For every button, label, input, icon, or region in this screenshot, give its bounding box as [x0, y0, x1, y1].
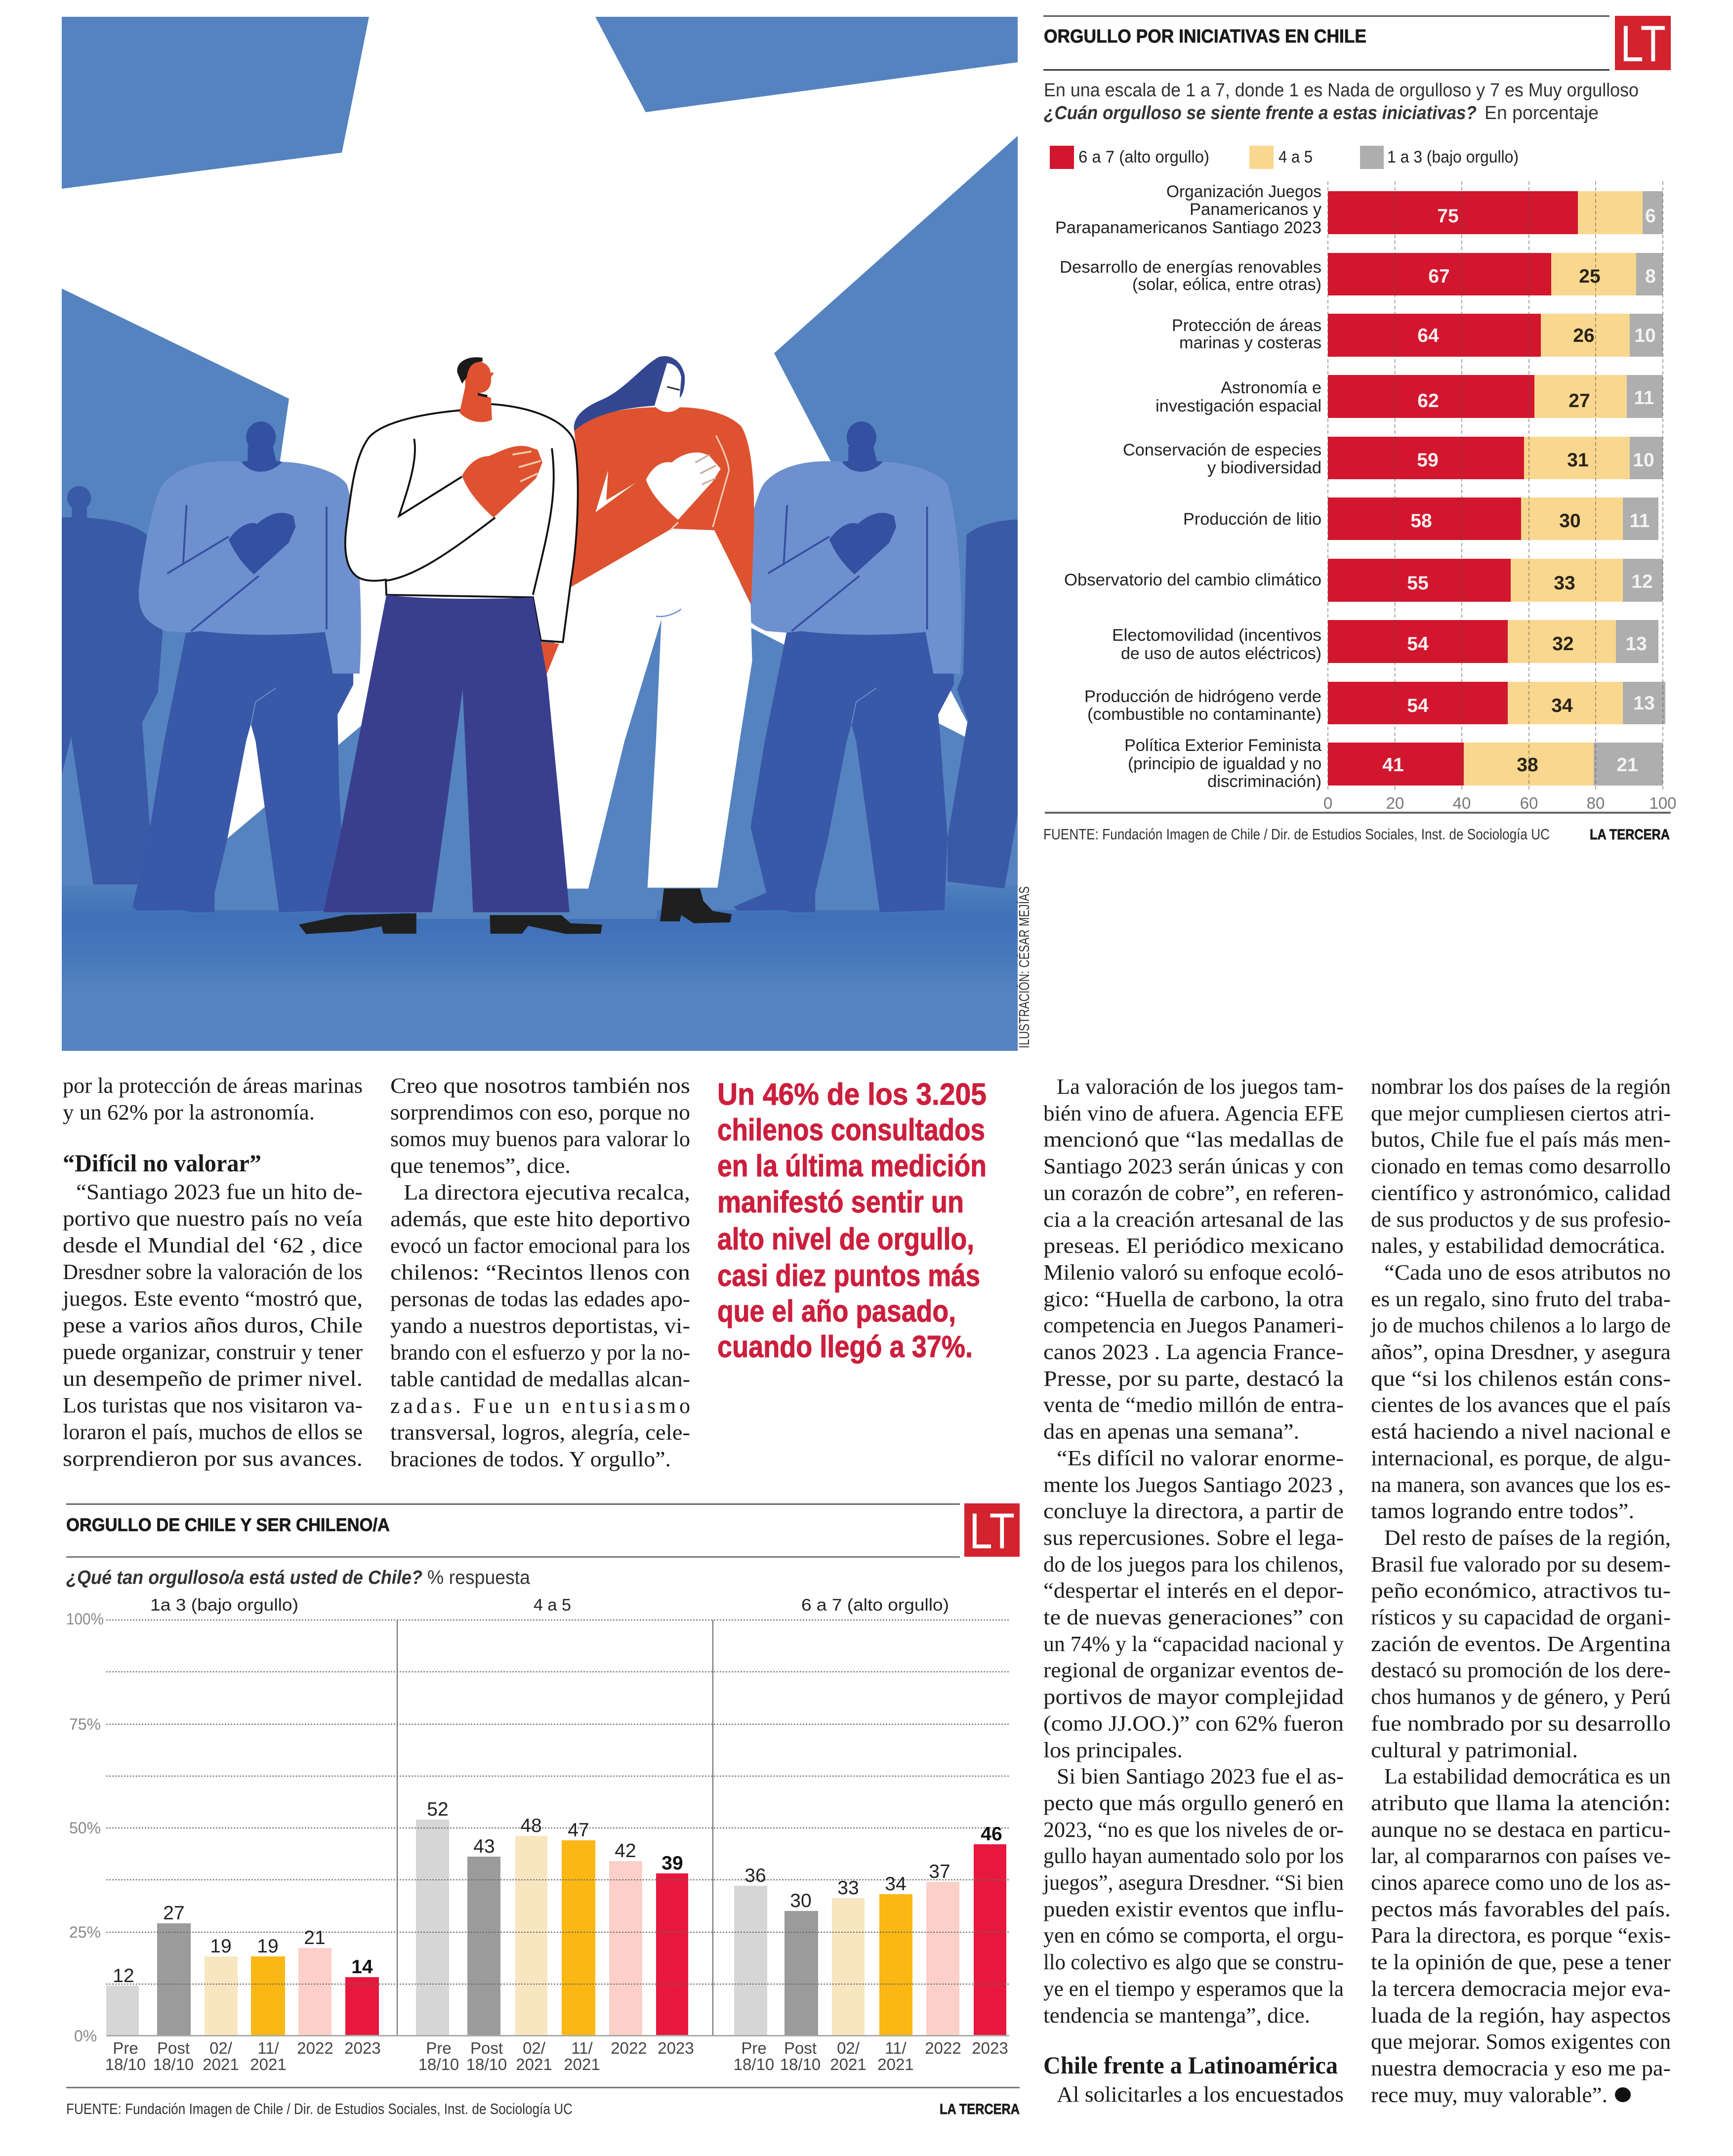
y axis labels: 75% — [69, 1715, 101, 1733]
article column 4: internacional, es porque, de algu- — [1371, 1446, 1671, 1470]
article column 1: un desempeño de primer nivel. — [63, 1367, 363, 1391]
bar values: 25 — [1579, 266, 1601, 287]
article column 3: portivos de mayor complejidad — [1043, 1685, 1344, 1709]
x axis: 80 — [1587, 794, 1605, 812]
row labels: discriminación) — [1207, 772, 1321, 791]
bars group 6 a 7 — [734, 1844, 1006, 2035]
y axis labels: 0% — [74, 2027, 97, 2045]
x axis labels: 2021 — [203, 2055, 239, 2073]
bar values: 14 — [351, 1956, 373, 1978]
x axis labels: 18/10 — [418, 2055, 459, 2073]
article column 4: te la opinión de que, pese a tener — [1371, 1950, 1671, 1974]
x axis labels: 2021 — [877, 2055, 914, 2073]
source line — [66, 2100, 1020, 2117]
row labels: Panamericanos y — [1190, 200, 1321, 219]
bar values: 34 — [885, 1873, 907, 1895]
bar values: 13 — [1633, 693, 1655, 714]
article column 3: un corazón de cobre”, en referen- — [1043, 1181, 1344, 1205]
floor — [62, 890, 1018, 970]
article column 2: chilenos: “Recintos llenos con — [390, 1260, 690, 1285]
row labels: marinas y costeras — [1179, 333, 1321, 352]
woman in red top — [546, 356, 754, 923]
article column 4: cionado en temas como desarrollo — [1371, 1154, 1671, 1178]
article column 4: Del resto de países de la región, — [1384, 1526, 1671, 1550]
bar values: 75 — [1437, 206, 1459, 227]
article column 4: que mejor cumpliesen ciertos atri- — [1371, 1101, 1671, 1125]
x axis labels: 18/10 — [734, 2055, 774, 2073]
bar values: 10 — [1634, 325, 1656, 346]
article column 3: tendencia se mantenga”, dice. — [1043, 2003, 1310, 2028]
bar values: 59 — [1417, 450, 1439, 471]
source line: LA TERCERA — [940, 2101, 1020, 2117]
x axis labels: 18/10 — [780, 2055, 821, 2073]
subheading: “Difícil no valorar” — [63, 1149, 261, 1177]
article column 3: competencia en Juegos Panameri- — [1043, 1313, 1344, 1337]
bar values: 31 — [1567, 450, 1589, 471]
chart subtitle: ¿Cuán orgulloso se siente frente a estas iniciativas? — [1044, 103, 1477, 124]
article column 4: que “si los chilenos están cons- — [1371, 1367, 1671, 1391]
x axis labels: 18/10 — [105, 2055, 146, 2073]
x axis labels: Post — [157, 2039, 190, 2057]
pull quote: en la última medición — [717, 1149, 987, 1183]
article column 2: table cantidad de medallas alcan- — [390, 1367, 690, 1391]
white star — [62, 17, 1018, 840]
x axis labels: 2022 — [611, 2039, 647, 2057]
x axis labels — [105, 2039, 1008, 2073]
article column 3: gico: “Huella de carbono, la otra — [1043, 1287, 1344, 1311]
bar values: 52 — [427, 1799, 449, 1820]
bar values: 34 — [1551, 695, 1573, 716]
article column 3: Santiago 2023 serán únicas y con — [1043, 1154, 1344, 1178]
article column 4: tamos logrando entre todos”. — [1371, 1499, 1634, 1523]
LT logo: LT — [1620, 15, 1666, 73]
article column 1: juegos. Este evento “mostró que, — [62, 1286, 363, 1311]
bar values — [1382, 206, 1656, 776]
article column 3: “despertar el interés en el depor- — [1043, 1578, 1344, 1603]
stacked bars — [1328, 181, 1665, 790]
bar values: 54 — [1407, 695, 1429, 716]
bar values: 43 — [473, 1836, 495, 1857]
article column 2: Creo que nosotros también nos — [390, 1074, 690, 1098]
article column 3: mente los Juegos Santiago 2023 , — [1043, 1473, 1344, 1497]
bar values: 19 — [257, 1936, 279, 1957]
article column 2: yando a nuestros deportistas, vi- — [390, 1314, 690, 1338]
article column 1: loraron el país, muchos de ellos se — [63, 1420, 363, 1444]
article column 1: sorprendieron por sus avances. — [63, 1447, 363, 1471]
bars group 4 a 5 — [416, 1820, 688, 2035]
x axis labels: 02/ — [209, 2039, 233, 2057]
source line: FUENTE: Fundación Imagen de Chile / Dir. de Estudios Sociales, Inst. de Sociología UC — [1043, 826, 1550, 843]
row labels: investigación espacial — [1155, 397, 1321, 415]
article column 2: zadas. Fue un entusiasmo — [390, 1394, 690, 1418]
article column 3: canos 2023 . La agencia France- — [1043, 1340, 1344, 1364]
chart subtitle: En porcentaje — [1485, 103, 1599, 124]
article column 4: nombrar los dos países de la región — [1371, 1075, 1671, 1099]
article column 2: La directora ejecutiva recalca, — [404, 1180, 690, 1204]
bar values: 8 — [1645, 266, 1656, 287]
article column 1: Los turistas que nos visitaron va- — [63, 1393, 363, 1417]
row labels: Producción de hidrógeno verde — [1084, 687, 1321, 706]
bar values: 33 — [837, 1877, 859, 1899]
pull quote: alto nivel de orgullo, — [717, 1222, 974, 1256]
article column 4: nales, y estabilidad democrática. — [1371, 1234, 1665, 1258]
x axis labels: 11/ — [571, 2039, 593, 2057]
row labels: Astronomía e — [1221, 378, 1321, 397]
article column 3: sus repercusiones. Sobre el lega- — [1043, 1526, 1344, 1550]
article column 3: Al solicitarles a los encuestados — [1057, 2082, 1344, 2107]
article column 4: La estabilidad democrática es un — [1384, 1764, 1671, 1788]
article column 4: está haciendo a nivel nacional e — [1371, 1419, 1671, 1444]
article column 4: cultural y patrimonial. — [1371, 1738, 1578, 1762]
article column 4 — [1370, 1075, 1671, 2107]
bar values: 27 — [163, 1903, 185, 1924]
bar values: 47 — [568, 1820, 589, 1841]
chart heading — [66, 1503, 960, 1558]
bar values: 30 — [1559, 510, 1581, 532]
LT logo: LT — [969, 1503, 1015, 1559]
x axis labels: Pre — [426, 2039, 452, 2057]
bar values: 11 — [1629, 510, 1650, 532]
bar values: 67 — [1428, 266, 1450, 287]
pull quote: cuando llegó a 37%. — [717, 1330, 973, 1364]
article column 4: destacó su promoción de los dere- — [1371, 1658, 1671, 1682]
article column 4: pectos más favorables del país. — [1371, 1897, 1671, 1921]
bar values: 21 — [1616, 754, 1638, 776]
x axis labels: 02/ — [523, 2039, 546, 2057]
article column 4: lar, al compararnos con países ve- — [1371, 1844, 1671, 1868]
bar values: 58 — [1410, 510, 1432, 532]
y axis labels — [66, 1610, 104, 2045]
pull quote: manifestó sentir un — [717, 1185, 964, 1219]
article column 3: venta de “medio millón de entra- — [1043, 1393, 1344, 1417]
article column 3: Presse, por su parte, destacó la — [1043, 1367, 1344, 1391]
bar values: 55 — [1407, 573, 1429, 594]
bar values: 11 — [1634, 387, 1654, 409]
article column 2: que tenemos”, dice. — [390, 1154, 571, 1178]
bars group 1 a 3 — [106, 1923, 379, 2035]
row labels: Producción de litio — [1183, 510, 1321, 529]
chart heading: ORGULLO DE CHILE Y SER CHILENO/A — [66, 1515, 390, 1535]
bar values: 48 — [520, 1815, 542, 1836]
article column 4: rece muy, muy valorable”. — [1371, 2083, 1608, 2107]
pull quote: chilenos consultados — [717, 1113, 985, 1147]
bar values: 42 — [615, 1840, 636, 1862]
article column 2: somos muy buenos para valorar lo — [390, 1127, 690, 1151]
article column 2: además, que este hito deportivo — [390, 1207, 690, 1231]
group headers — [150, 1596, 949, 1615]
article column 4: peño económico, atractivos tu- — [1371, 1578, 1671, 1603]
y axis labels: 50% — [69, 1819, 101, 1837]
article column 2: personas de todas las edades apo- — [390, 1287, 690, 1311]
bar values: 41 — [1382, 754, 1404, 776]
legend: 1 a 3 (bajo orgullo) — [1387, 148, 1519, 166]
bar values: 10 — [1633, 450, 1654, 471]
bar values: 46 — [981, 1824, 1002, 1845]
x axis labels: 18/10 — [153, 2055, 194, 2073]
article column 4: fue nombrado por su desarrollo — [1371, 1711, 1671, 1736]
row labels: Observatorio del cambio climático — [1064, 571, 1321, 589]
article column 4: “Cada uno de esos atributos no — [1384, 1260, 1671, 1285]
article column 3: los principales. — [1043, 1738, 1183, 1762]
x axis labels: 2022 — [297, 2039, 333, 2057]
article column 1: “Santiago 2023 fue un hito de- — [76, 1180, 363, 1204]
article column 2: sorprendimos con eso, porque no — [390, 1100, 690, 1124]
row labels — [1055, 182, 1321, 791]
article column 3: do de los juegos para los chilenos, — [1043, 1552, 1344, 1576]
article column 4: científico y astronómico, calidad — [1371, 1181, 1671, 1205]
illustration credit: ILUSTRACIÓN: CÉSAR MEJÍAS — [1016, 886, 1032, 1048]
bar values: 6 — [1645, 206, 1656, 227]
article column 1: portivo que nuestro país no veía — [63, 1206, 363, 1231]
row labels: Política Exterior Feminista — [1124, 736, 1321, 755]
legend: 6 a 7 (alto orgullo) — [1078, 148, 1209, 166]
x axis: 60 — [1520, 794, 1538, 812]
article column 3: Si bien Santiago 2023 fue el as- — [1057, 1764, 1344, 1788]
row labels: Parapanamericanos Santiago 2023 — [1055, 218, 1321, 237]
article column 3: un 74% y la “capacidad nacional y — [1043, 1632, 1344, 1656]
x axis labels: Pre — [741, 2039, 767, 2057]
panel: orgullo de Chile chart — [66, 1503, 1020, 2117]
chart heading: ORGULLO POR INICIATIVAS EN CHILE — [1044, 26, 1366, 47]
row labels: Desarrollo de energías renovables — [1060, 258, 1321, 277]
legend — [1050, 146, 1519, 169]
article column 3: (como JJ.OO.)” con 62% fueron — [1043, 1711, 1344, 1736]
article column 4: que mejorar. Somos exigentes con — [1371, 2030, 1671, 2054]
article column 2: evocó un factor emocional para los — [390, 1234, 690, 1258]
article column 4: Para la directora, es porque “exis- — [1371, 1923, 1671, 1948]
article column 3: 2023, “no es que los niveles de or- — [1043, 1818, 1344, 1842]
bar values: 62 — [1417, 390, 1439, 412]
x axis labels: 2021 — [564, 2055, 600, 2073]
article column 4: la tercera democracia mejor eva- — [1371, 1977, 1671, 2001]
x axis — [1045, 794, 1677, 814]
x axis: 0 — [1323, 794, 1332, 812]
article column 1: por la protección de áreas marinas — [63, 1074, 363, 1098]
illustration: people with hand on heart before a star — [59, 17, 1028, 1051]
bar values: 30 — [790, 1890, 812, 1911]
row labels: Electomovilidad (incentivos — [1112, 626, 1321, 645]
row labels: Protección de áreas — [1172, 316, 1321, 335]
pull quote — [717, 1078, 987, 1364]
bar values: 13 — [1625, 633, 1647, 655]
row labels: Conservación de especies — [1123, 441, 1321, 459]
row labels: (principio de igualdad y no — [1128, 754, 1321, 773]
article column 2: transversal, logros, alegría, cele- — [390, 1420, 690, 1445]
article column 4: jo de muchos chilenos a lo largo de — [1370, 1313, 1671, 1337]
row labels: de uso de autos eléctricos) — [1121, 644, 1321, 663]
background figure right — [948, 519, 1018, 888]
article column 3: bién vino de afuera. Agencia EFE — [1043, 1101, 1344, 1125]
x axis labels: 11/ — [885, 2039, 907, 2057]
row labels: Organización Juegos — [1166, 182, 1321, 201]
x axis labels: 18/10 — [466, 2055, 507, 2073]
question: % respuesta — [427, 1567, 530, 1588]
article column 3: llo colectivo es algo que se constru- — [1043, 1950, 1344, 1974]
article column 1: Dresdner sobre la valoración de los — [63, 1260, 363, 1284]
figure mid right — [733, 421, 961, 912]
article column 3: concluye la directora, a partir de — [1043, 1499, 1344, 1523]
bar values: 33 — [1554, 573, 1575, 594]
bar values: 26 — [1573, 325, 1595, 346]
group headers: 4 a 5 — [534, 1596, 571, 1615]
article column 3: La valoración de los juegos tam- — [1057, 1075, 1344, 1099]
x axis labels: Pre — [113, 2039, 138, 2057]
bar values: 38 — [1517, 754, 1538, 776]
article column 1: desde el Mundial del ‘62 , dice — [63, 1233, 363, 1257]
row labels: (solar, eólica, entre otras) — [1132, 275, 1321, 294]
article column 3: yen en cómo se comporta, el orgu- — [1043, 1923, 1344, 1948]
article column 3: ye en el tiempo y esperamos que la — [1043, 1977, 1344, 2001]
x axis labels: 2022 — [925, 2039, 961, 2057]
bar values: 12 — [113, 1965, 134, 1987]
article column 2 — [390, 1074, 690, 1471]
article column 3: cia a la creación artesanal de las — [1043, 1207, 1344, 1232]
panel: orgullo por iniciativas chart — [1043, 15, 1677, 843]
article column 3 — [1042, 1075, 1344, 2107]
article column 4: rísticos y su capacidad de organi- — [1371, 1605, 1671, 1629]
x axis labels: 2023 — [972, 2039, 1008, 2057]
group headers: 1a 3 (bajo orgullo) — [150, 1596, 298, 1615]
article column 1 — [62, 1074, 363, 1471]
article column 2: braciones de todos. Y orgullo”. — [390, 1447, 671, 1471]
article column 4: cientes de los avances que el país — [1371, 1393, 1671, 1417]
article column 1: puede organizar, construir y tener — [63, 1340, 363, 1364]
bar values: 12 — [1631, 571, 1653, 592]
bar values: 39 — [661, 1853, 683, 1874]
y axis labels: 25% — [69, 1923, 101, 1941]
chart subtitle — [1044, 80, 1639, 124]
article column 3: preseas. El periódico mexicano — [1043, 1234, 1344, 1258]
figure mid left — [133, 421, 361, 912]
article column 4: chos humanos y de género, y Perú — [1371, 1685, 1671, 1709]
article column 4: luada de la región, hay aspectos — [1371, 2003, 1671, 2028]
legend: 4 a 5 — [1279, 148, 1313, 166]
article column 1: pese a varios años duros, Chile — [63, 1313, 363, 1337]
article column 3: mencionó que “las medallas de — [1043, 1127, 1344, 1152]
row labels: (combustible no contaminante) — [1087, 705, 1321, 724]
subheading: Chile frente a Latinoamérica — [1043, 2051, 1338, 2079]
man in white sweater — [299, 357, 602, 934]
article column 3: gullo hayan aumentado solo por los — [1043, 1844, 1344, 1868]
row labels: y biodiversidad — [1207, 458, 1321, 477]
article column 4: na manera, son avances que los es- — [1371, 1473, 1671, 1497]
article column 4: aunque no se destaca en particu- — [1371, 1818, 1671, 1842]
bar values: 37 — [929, 1861, 950, 1882]
x axis labels: 2021 — [250, 2055, 287, 2073]
article column 1: y un 62% por la astronomía. — [63, 1100, 315, 1124]
question: ¿Qué tan orgulloso/a está usted de Chile? — [66, 1567, 422, 1588]
bar values: 64 — [1417, 325, 1439, 346]
x axis: 100 — [1649, 794, 1677, 812]
x axis labels: 11/ — [257, 2039, 280, 2057]
article column 3: pueden existir eventos que influ- — [1043, 1897, 1344, 1921]
article column 2: brando con el esfuerzo y por la no- — [390, 1340, 690, 1365]
article column 3: Milenio valoró su enfoque ecoló- — [1043, 1260, 1344, 1285]
x axis labels: 2021 — [516, 2055, 552, 2073]
article column 4: años”, opina Dresdner, y asegura — [1371, 1340, 1671, 1364]
x axis labels: 2023 — [344, 2039, 381, 2057]
background figure left — [59, 486, 163, 884]
x axis: 40 — [1453, 794, 1471, 812]
bar values: 36 — [744, 1865, 766, 1886]
end-of-article bullet — [1615, 2087, 1631, 2102]
y axis labels: 100% — [66, 1610, 104, 1628]
bar values: 54 — [1407, 633, 1429, 655]
bar values: 21 — [304, 1927, 326, 1949]
article column 4: es un regalo, sino fruto del traba- — [1371, 1287, 1671, 1311]
group headers: 6 a 7 (alto orgullo) — [801, 1596, 949, 1615]
article column 4: nuestra democracia y eso me pa- — [1371, 2056, 1671, 2080]
article column 3: pecto que más orgullo generó en — [1043, 1791, 1344, 1815]
article column 3: das en apenas una semana”. — [1043, 1419, 1299, 1444]
article column 3: juegos”, asegura Dresdner. “Si bien — [1042, 1870, 1344, 1895]
article column 4: atributo que llama la atención: — [1371, 1791, 1671, 1815]
article column 3: “Es difícil no valorar enorme- — [1057, 1446, 1344, 1470]
bar values: 32 — [1552, 633, 1574, 655]
pull quote: Un 46% de los 3.205 — [717, 1078, 987, 1112]
source line: LA TERCERA — [1590, 827, 1670, 843]
pull quote: que el año pasado, — [717, 1294, 956, 1328]
chart subtitle: En una escala de 1 a 7, donde 1 es Nada de orgulloso y 7 es Muy orgulloso — [1044, 80, 1639, 101]
x axis labels: 2023 — [658, 2039, 694, 2057]
x axis labels: 02/ — [837, 2039, 860, 2057]
article column 4: cinos aparece como uno de los as- — [1371, 1870, 1671, 1895]
bar values: 27 — [1568, 390, 1590, 412]
source line: FUENTE: Fundación Imagen de Chile / Dir. de Estudios Sociales, Inst. de Sociología UC — [66, 2100, 573, 2117]
x axis labels: Post — [470, 2039, 503, 2057]
article column 3: te de nuevas generaciones” con — [1043, 1605, 1344, 1629]
bar values: 19 — [210, 1936, 232, 1957]
chart heading — [1043, 15, 1609, 71]
article column 3: regional de organizar eventos de- — [1043, 1658, 1344, 1682]
article column 4: de sus productos y de sus profesio- — [1371, 1207, 1671, 1232]
x axis: 20 — [1386, 794, 1404, 812]
pull quote: casi diez puntos más — [717, 1259, 980, 1293]
bar values — [113, 1799, 1002, 1987]
x axis labels: 2021 — [830, 2055, 866, 2073]
article column 4: Brasil fue valorado por su desem- — [1371, 1552, 1671, 1576]
article column 4: butos, Chile fue el país más men- — [1371, 1127, 1671, 1152]
x axis labels: Post — [784, 2039, 817, 2057]
article column 4: zación de eventos. De Argentina — [1371, 1632, 1671, 1656]
